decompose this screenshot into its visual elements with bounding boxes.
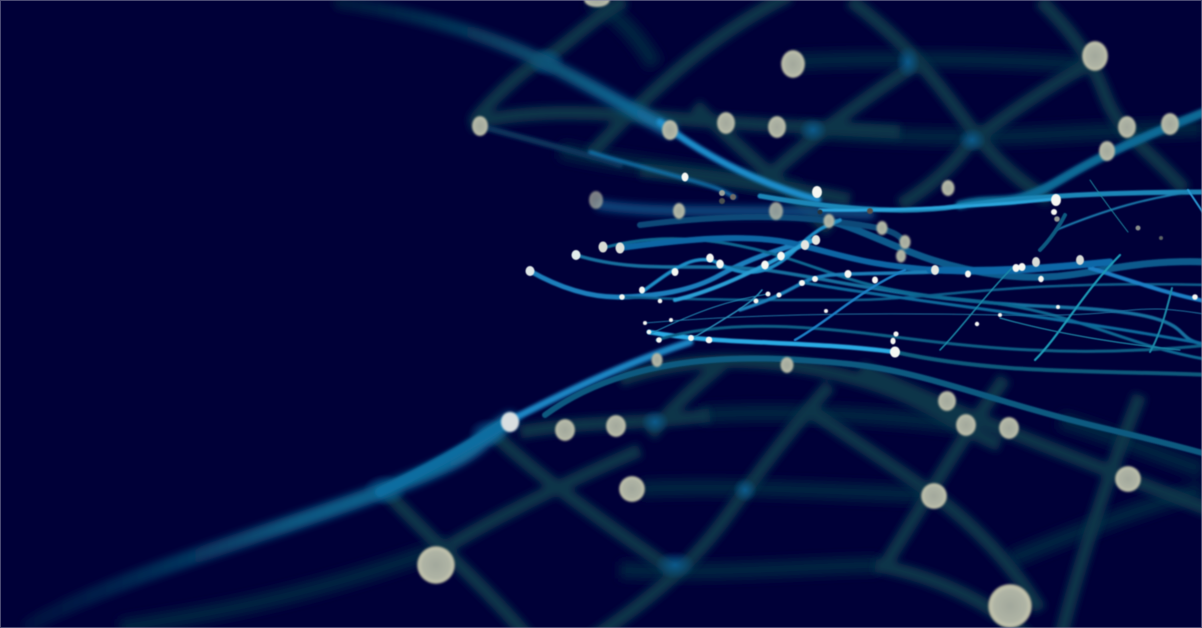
thin sharp strands and perspective grid (645, 180, 1202, 360)
centre tubes (thick, slightly soft) (530, 190, 1202, 455)
mesh junction glows (363, 46, 986, 579)
small bright nodes (526, 172, 1198, 358)
large soft nodes (417, 0, 1179, 628)
near blurred mesh (385, 0, 1202, 628)
